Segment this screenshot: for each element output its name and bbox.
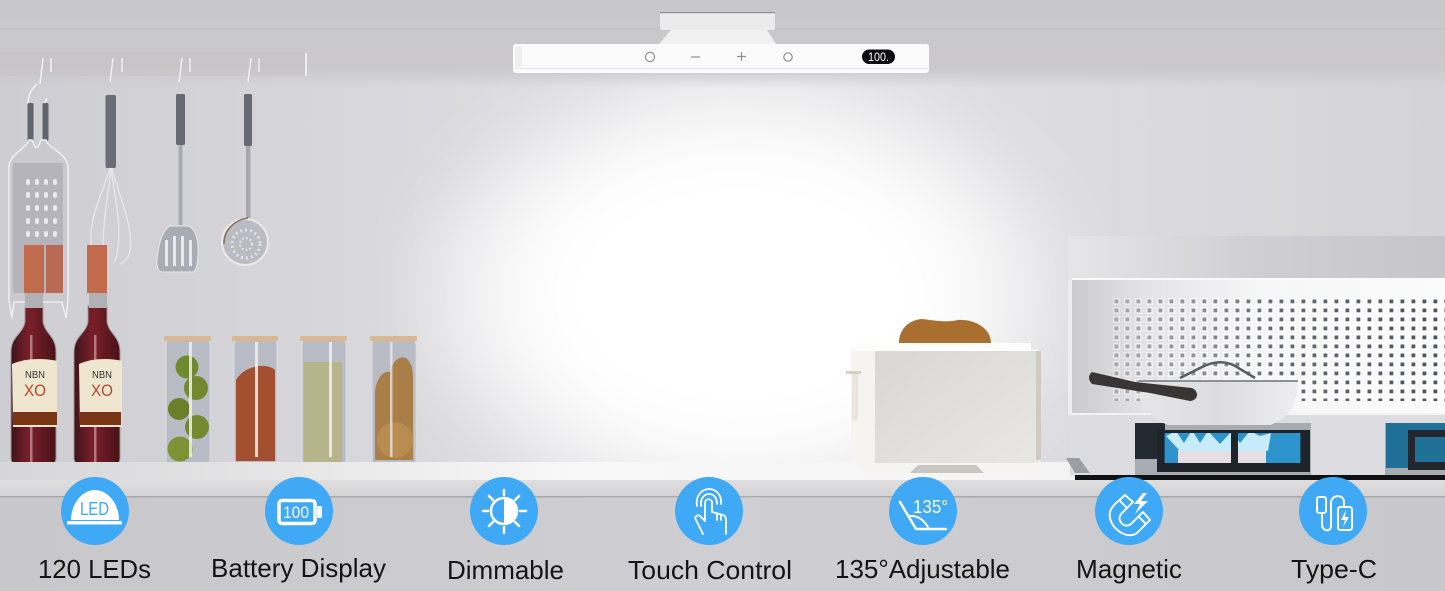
icon: battery level: [265, 477, 333, 545]
feature: Touch Control: [628, 477, 792, 585]
jar: olive crackers: [300, 336, 347, 464]
icon: touch finger: [675, 477, 743, 545]
frying pan with lid: [1089, 362, 1298, 425]
jar: green limes: [164, 336, 211, 464]
magnetic LED light bar: [513, 12, 929, 73]
wine bottles: [11, 245, 122, 465]
utensil: grater: [9, 58, 68, 318]
wine bottle two: NBN: [92, 370, 112, 381]
utensil: spatula: [157, 58, 198, 272]
feature: Magnetic: [1076, 477, 1182, 584]
label: 120 LEDs: 120 LEDs: [38, 554, 151, 584]
icon: 135 degree angle: [889, 477, 957, 545]
glass storage jars: [164, 336, 417, 464]
stove top: [1066, 423, 1445, 480]
perforated vent panel: [1112, 297, 1445, 401]
utensil: slotted ladle: [222, 58, 268, 265]
utensil: whisk: [91, 58, 131, 264]
icon: USB-C cable and power bank: [1299, 477, 1367, 545]
wine bottle one: [11, 245, 57, 465]
counter top: [0, 462, 1445, 591]
feature: 120 LEDs: [38, 477, 151, 584]
wine bottle two: [74, 245, 122, 465]
jar: red spice: [232, 336, 278, 464]
lamp mount: [659, 12, 776, 44]
feature icon row: [38, 477, 1377, 585]
label: Type-C: Type-C: [1291, 554, 1377, 584]
lamp battery display: [862, 50, 895, 64]
icon: 135 degree angle: 135°: [913, 497, 948, 517]
toast: [899, 319, 991, 343]
label: Magnetic: Magnetic: [1076, 554, 1182, 584]
label: Battery Display: Battery Display: [211, 553, 386, 583]
hanging kitchen utensils: [9, 58, 268, 318]
wine bottle one: XO: [24, 381, 46, 400]
label: Touch Control: Touch Control: [628, 555, 792, 585]
range hood and backsplash: [1068, 236, 1445, 476]
pan body: [1139, 381, 1298, 425]
jar: round biscuits: [370, 336, 417, 464]
label: Dimmable: Dimmable: [447, 555, 564, 585]
second gas burner: [1385, 423, 1445, 475]
lamp battery display: 100.: [868, 50, 889, 64]
icon: horseshoe magnet: [1095, 477, 1163, 545]
wine bottle two: XO: [91, 381, 113, 400]
lamp touch buttons: [645, 52, 792, 62]
feature: 135° Adjustable: [835, 477, 1010, 584]
toaster body: [846, 343, 1041, 473]
icon: LED dome lamp: LED: [80, 499, 109, 519]
gas burner with blue flame: [1135, 423, 1311, 475]
wine bottle one: NBN: [25, 370, 45, 381]
feature: Dimmable: [447, 477, 564, 585]
feature: Battery Display: [211, 477, 386, 583]
icon: half-filled sun: [470, 477, 538, 545]
toaster with bread: [846, 319, 1041, 473]
pan handle: [1089, 372, 1197, 401]
lid handle: [1180, 362, 1255, 378]
lamp bar body: [513, 44, 929, 73]
icon: battery level: 100: [283, 503, 309, 522]
label: 135° Adjustable: 135°Adjustable: [835, 554, 1010, 584]
feature: Type-C: [1291, 477, 1377, 584]
